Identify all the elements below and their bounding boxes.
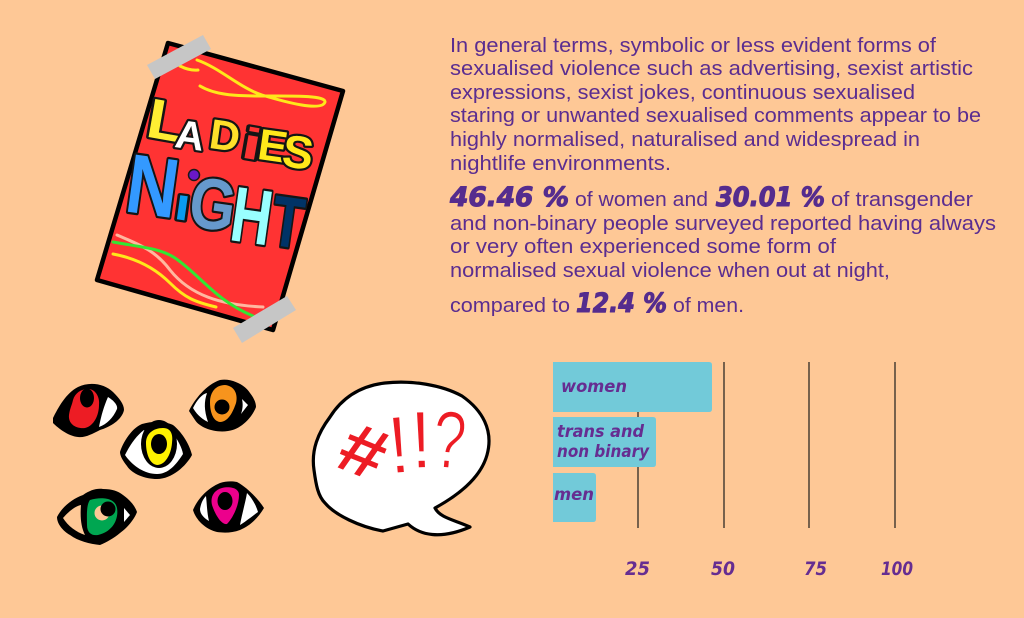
intro text block: sexualised violence such as advertising, sexist artistic	[450, 57, 973, 80]
statistics text block: of men.	[673, 294, 744, 317]
bubble symbols: !	[383, 399, 414, 492]
eye: orange	[189, 380, 256, 431]
intro text block: expressions, sexist jokes, continuous sexualised	[450, 81, 915, 104]
bubble symbols	[328, 393, 470, 497]
bar chart	[553, 362, 913, 580]
poster title: ladies: S	[279, 124, 317, 180]
statistics text block: compared to	[450, 294, 570, 317]
bottom wavy lines	[113, 235, 263, 316]
bubble symbols: #	[328, 406, 399, 497]
poster title: ladies: i	[238, 119, 266, 170]
poster title: night: ı	[172, 178, 194, 231]
bubble symbols: !	[408, 395, 434, 486]
axis labels	[625, 559, 913, 580]
statistics text block: of transgender	[831, 188, 973, 211]
eyes group	[53, 380, 264, 545]
intro text block: staring or unwanted sexualised comments appear to be	[450, 104, 981, 127]
poster title: night: G	[185, 161, 241, 247]
grid lines	[638, 362, 895, 528]
poster title: ladies: D	[207, 110, 243, 161]
intro text block: nightlife environments.	[450, 152, 671, 175]
stat: men: 12.4 %	[576, 288, 667, 319]
bar: trans and non binary	[553, 417, 656, 467]
axis labels: 25	[625, 559, 650, 580]
bar: trans and non binary: non binary	[557, 442, 650, 462]
top yellow swirls	[180, 60, 325, 106]
eye: yellow	[120, 420, 192, 479]
bar: trans and non binary: trans and	[557, 422, 645, 442]
speech bubble	[313, 382, 489, 535]
poster title: night: T	[266, 181, 309, 265]
poster title: ladies: L	[142, 86, 192, 155]
stat: women: 46.46 %	[449, 182, 569, 213]
statistics text block: and non-binary people surveyed reported having always	[450, 212, 996, 235]
poster title: night: H	[226, 171, 278, 263]
eye: red	[53, 384, 124, 437]
intro text block	[450, 34, 981, 175]
poster title: night: N	[121, 135, 185, 236]
poster sheet	[97, 43, 343, 330]
tape top	[147, 35, 211, 79]
poster title: ladies	[142, 86, 317, 180]
statistics text block: normalised sexual violence when out at night,	[450, 259, 890, 282]
bar: men	[553, 473, 596, 522]
poster title: ladies: A	[172, 112, 207, 160]
poster: ladies night	[97, 35, 343, 343]
bar: women: women	[561, 377, 627, 397]
statistics text block	[449, 182, 996, 319]
axis labels: 100	[881, 559, 913, 580]
bar: women	[553, 362, 712, 412]
poster title: night	[121, 135, 309, 265]
stat: trans and non-binary: 30.01 %	[716, 182, 825, 213]
intro text block: highly normalised, naturalised and widespread in	[450, 128, 920, 151]
tape bottom	[233, 296, 296, 343]
statistics text block: of women and	[575, 188, 708, 211]
bubble symbols: ?	[429, 393, 470, 488]
axis labels: 75	[804, 559, 827, 580]
axis labels: 50	[711, 559, 735, 580]
intro text block: In general terms, symbolic or less evident forms of	[450, 34, 936, 57]
statistics text block: or very often experienced some form of	[450, 235, 836, 258]
bubble outline	[313, 382, 489, 535]
eye: magenta	[193, 481, 264, 533]
poster title: ladies: E	[255, 120, 291, 173]
eye: green	[57, 489, 137, 545]
bar: men: men	[554, 485, 594, 505]
